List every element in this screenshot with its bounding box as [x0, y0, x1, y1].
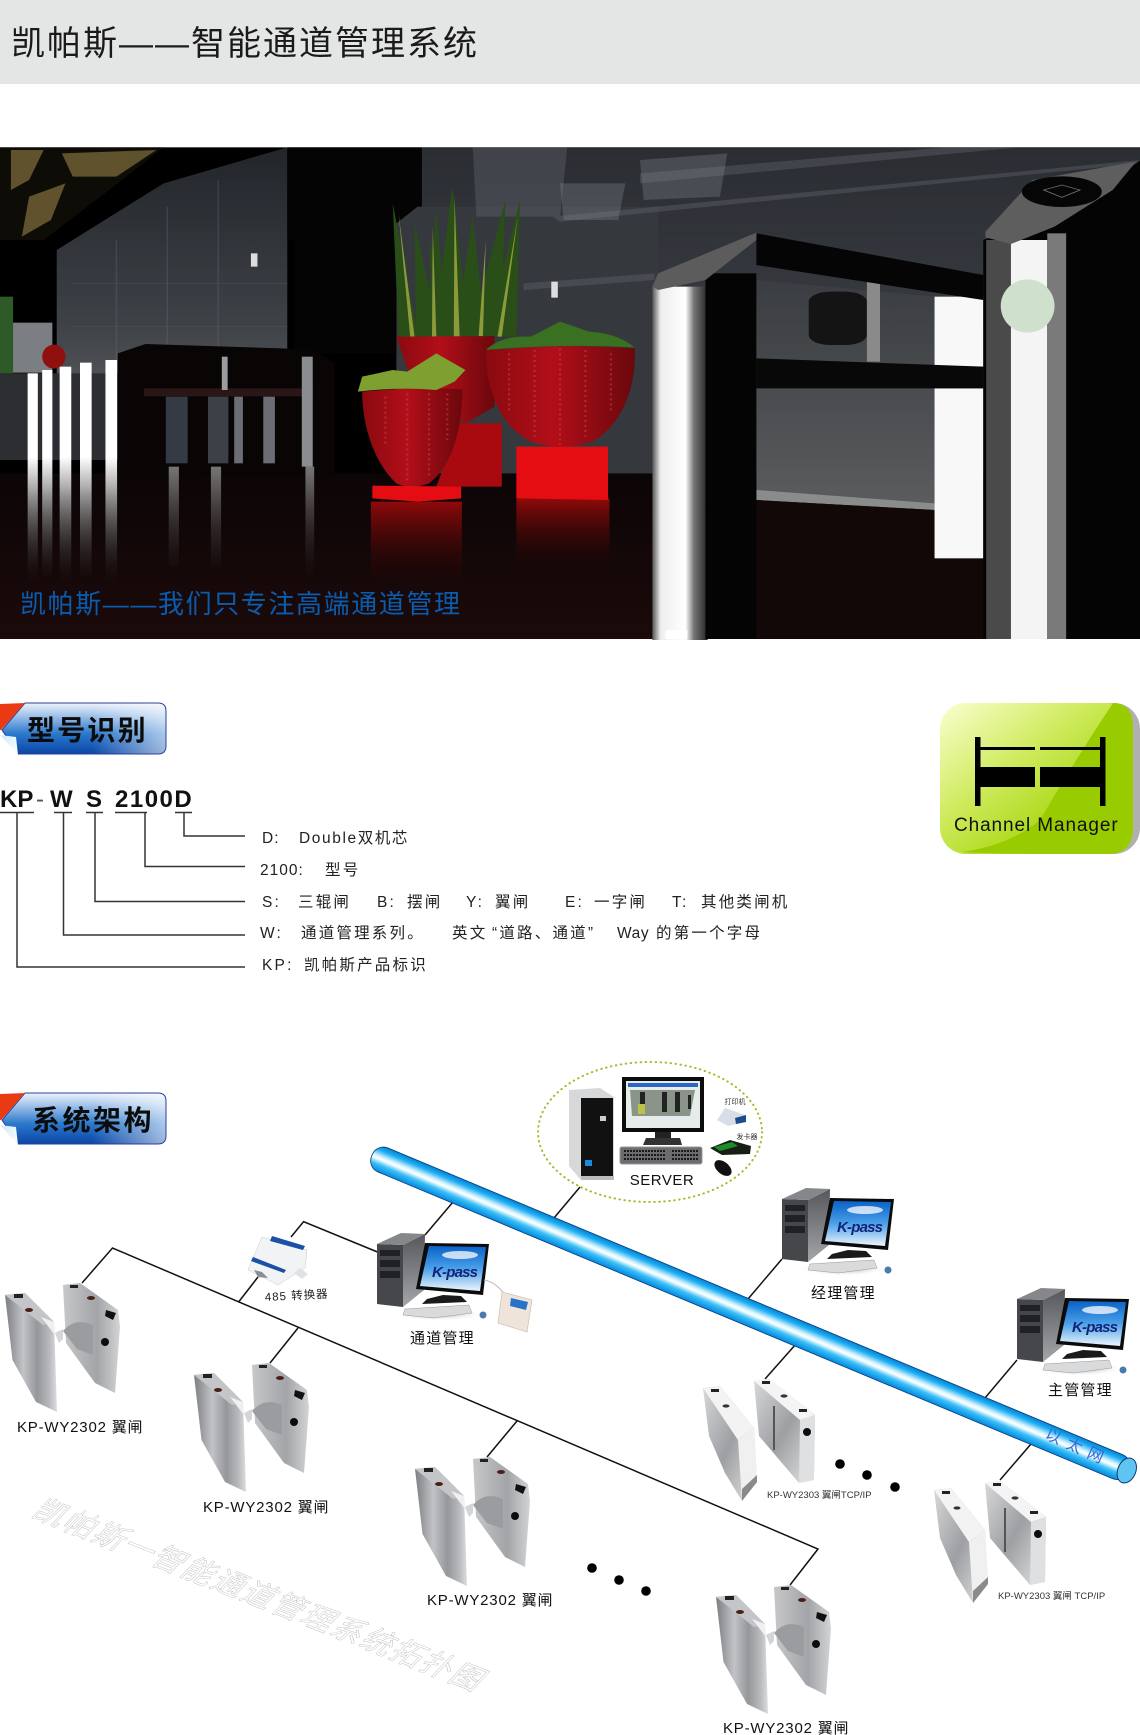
- explanation lines: 凯帕斯产品标识: [304, 956, 428, 974]
- RS485 bus and connection lines: [82, 1187, 1031, 1585]
- explanation lines: “道路、通道”: [492, 924, 595, 942]
- gate KP-WY2302 #2: [194, 1363, 329, 1516]
- pipe label: 以太网: [1042, 1425, 1113, 1470]
- gate KP-WY2302 #1: [5, 1283, 143, 1436]
- explanation lines: 摆闸: [407, 893, 442, 911]
- section badge: model identification: [0, 703, 166, 755]
- model code: -: [36, 786, 44, 813]
- photo: turnstile gates in lobby: [0, 147, 1140, 640]
- explanation lines: D:: [262, 830, 280, 847]
- server monitor: [622, 1077, 704, 1145]
- explanation lines: 英文: [452, 924, 487, 942]
- explanation lines: Y:: [466, 894, 484, 911]
- explanation lines: S:: [262, 894, 281, 911]
- explanation lines: E:: [565, 894, 584, 911]
- badge text: 型号识别: [27, 715, 148, 746]
- 485 converter: [248, 1236, 329, 1304]
- slogan: 凯帕斯——我们只专注高端通道管理: [20, 589, 462, 619]
- card reader: [484, 1280, 532, 1332]
- gate KP-WY2303 #1: [703, 1379, 872, 1501]
- gate label: KP-WY2303 翼闸 TCP/IP: [998, 1590, 1105, 1602]
- badge text: 系统架构: [32, 1105, 154, 1136]
- printer: 打印机: [724, 1097, 746, 1106]
- explanation lines: KP:: [262, 957, 294, 974]
- icon: Channel Manager: [940, 703, 1140, 854]
- explanation lines: 三辊闸: [298, 893, 351, 911]
- watermark: 凯帕斯一智能通道管理系统拓扑图: [25, 1495, 496, 1697]
- gate KP-WY2302 #3: [415, 1457, 553, 1609]
- gate label: KP-WY2302 翼闸: [17, 1419, 143, 1436]
- continuation dots: TCP/IP gates: [835, 1459, 900, 1492]
- ethernet pipe: [367, 1143, 1140, 1486]
- title: 凯帕斯——智能通道管理系统: [11, 25, 479, 63]
- gate KP-WY2302 #4: [716, 1585, 849, 1735]
- mouse: [711, 1157, 735, 1179]
- explanation lines: 的第一个字母: [656, 924, 762, 942]
- explanation lines: 2100:: [260, 862, 304, 879]
- computer: manager management: [782, 1188, 894, 1302]
- section badge: system architecture: [0, 1093, 166, 1145]
- explanation lines: Way: [617, 925, 649, 942]
- server keyboard: [620, 1147, 702, 1164]
- explanation lines: [260, 829, 790, 974]
- icon label: Channel Manager: [954, 815, 1119, 836]
- card issuer: 发卡器: [736, 1132, 758, 1141]
- explanation lines: 型号: [325, 861, 360, 879]
- model code: W: [50, 786, 73, 813]
- gate KP-WY2303 #2: [934, 1481, 1105, 1603]
- continuation dots: 485 gates: [587, 1563, 651, 1596]
- computer: manager management: K-pass: [837, 1219, 883, 1236]
- card issuer: [710, 1132, 758, 1155]
- plants and red pots: [358, 187, 635, 582]
- gate label: KP-WY2303 翼闸TCP/IP: [767, 1489, 872, 1501]
- computer: channel management: [377, 1233, 532, 1347]
- model code: 2100D: [115, 786, 193, 813]
- model code: S: [86, 786, 102, 813]
- left gate row in photo: [28, 344, 335, 587]
- explanation lines: 翼闸: [495, 893, 530, 911]
- explanation lines: T:: [672, 894, 688, 911]
- model code: KP: [0, 786, 33, 813]
- explanation lines: 通道管理系列。: [301, 924, 425, 942]
- printer: [717, 1097, 746, 1126]
- explanation lines: W:: [260, 925, 283, 942]
- gate glyph: [975, 737, 1106, 806]
- explanation lines: B:: [377, 894, 396, 911]
- near gate in photo: [652, 160, 1140, 640]
- label: 主管管理: [1048, 1382, 1113, 1399]
- computer: supervisor management: K-pass: [1072, 1319, 1118, 1336]
- explanation lines: 其他类闸机: [701, 893, 790, 911]
- server tower: [569, 1088, 614, 1180]
- server group: [538, 1062, 762, 1202]
- gate label: KP-WY2302 翼闸: [203, 1499, 329, 1516]
- bracket lines: [0, 812, 245, 967]
- server label: SERVER: [630, 1172, 694, 1189]
- converter label: 485 转换器: [264, 1287, 329, 1304]
- gate label: KP-WY2302 翼闸: [427, 1592, 553, 1609]
- label: 经理管理: [811, 1285, 876, 1302]
- explanation lines: 一字闸: [594, 893, 647, 911]
- label: 通道管理: [410, 1330, 475, 1347]
- explanation lines: Double双机芯: [299, 829, 409, 847]
- computer: supervisor management: [1017, 1288, 1129, 1399]
- header bar: [0, 0, 1140, 84]
- computer: channel management: K-pass: [432, 1264, 478, 1281]
- model code diagram: [0, 786, 790, 974]
